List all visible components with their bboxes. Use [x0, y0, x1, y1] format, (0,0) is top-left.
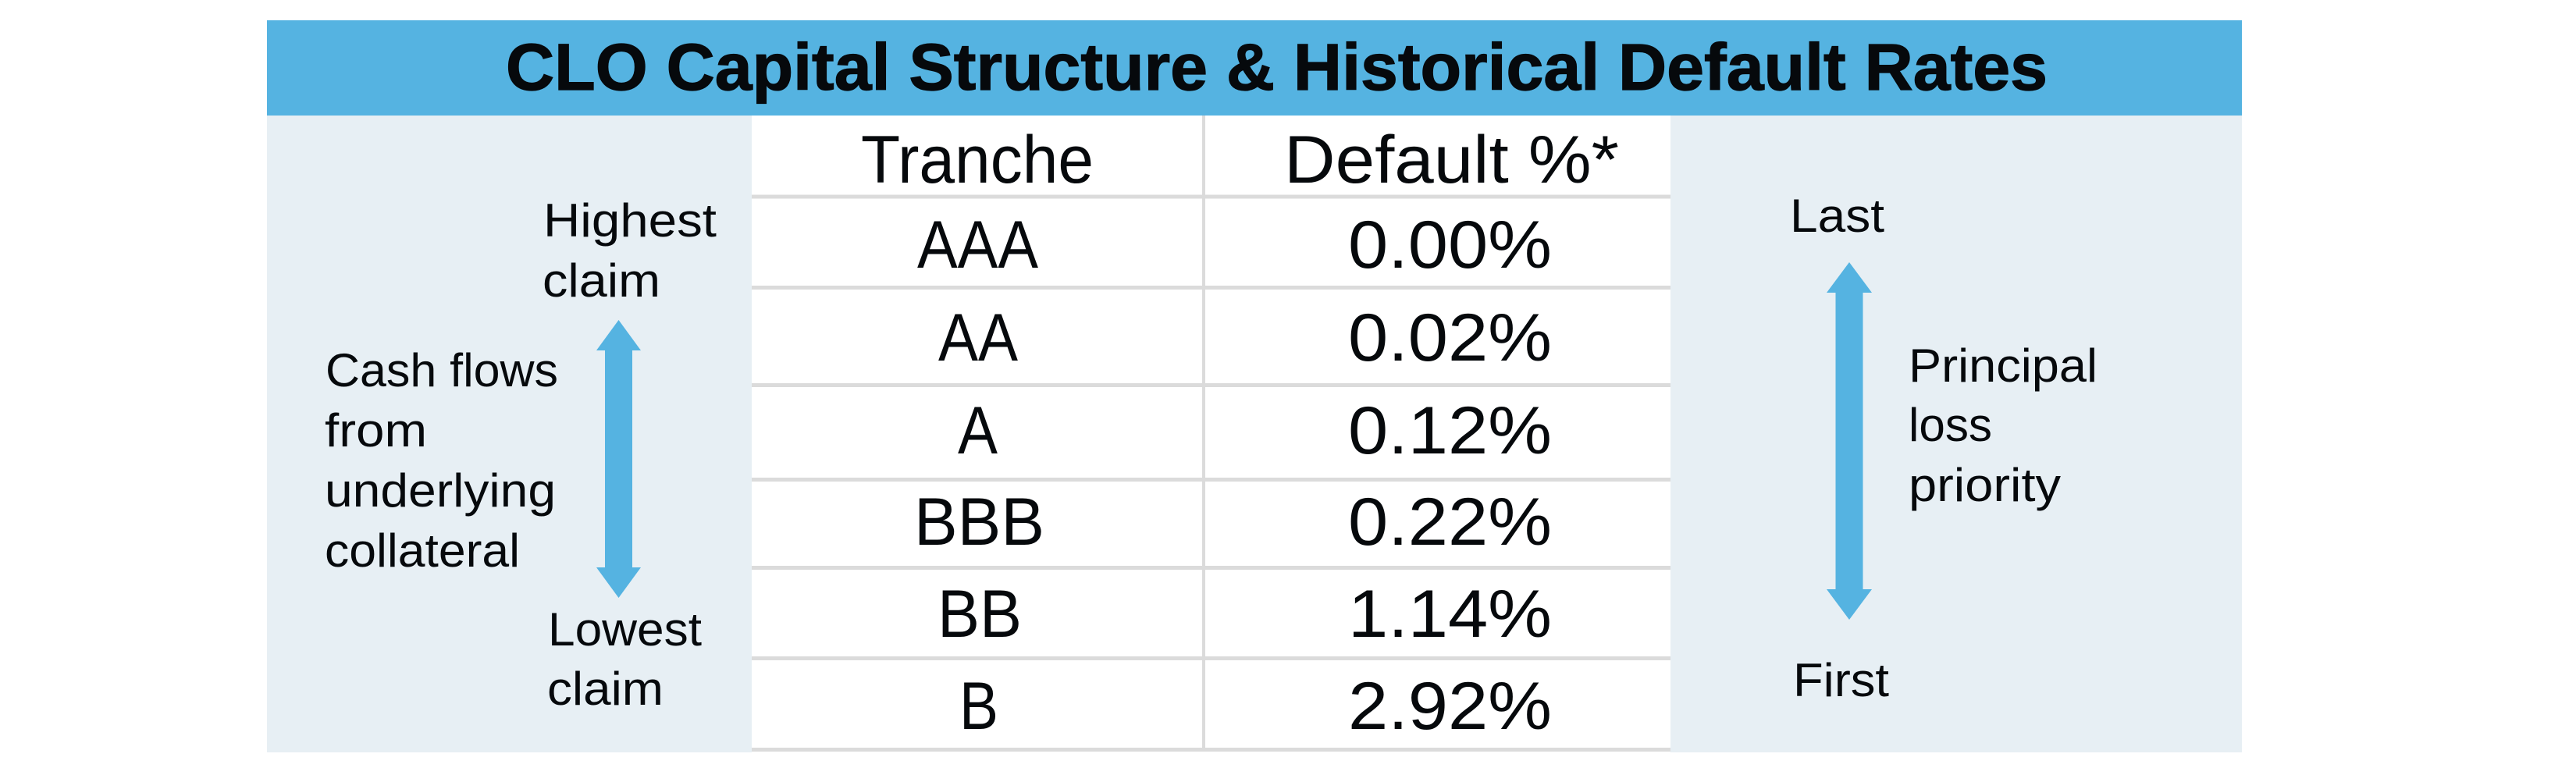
- table: [752, 116, 1670, 752]
- label: lowest claim: [547, 603, 702, 715]
- label: highest claim: claim: [543, 254, 660, 307]
- row: BBB: [914, 485, 1552, 560]
- label: cash flows from underlying collateral: collateral: [325, 524, 520, 577]
- row: BBB: BBB: [914, 485, 1044, 560]
- row: AA: [938, 300, 1552, 375]
- label: lowest claim: Lowest: [548, 603, 702, 656]
- label: principal loss priority: priority: [1909, 459, 2061, 511]
- row: AAA: [917, 208, 1552, 283]
- panel: left side background: [267, 116, 752, 752]
- row: BB: BB: [938, 577, 1022, 652]
- row: A: [958, 393, 1552, 468]
- row: BBB: 0.22%: [1348, 485, 1552, 560]
- label: principal loss priority: [1909, 340, 2097, 511]
- row: A: 0.12%: [1348, 393, 1552, 468]
- label: cash flows from underlying collateral: underlying: [325, 464, 556, 517]
- arrow: cash flow priority double-headed: [596, 320, 641, 598]
- row: B: [959, 669, 1552, 744]
- label: lowest claim: claim: [547, 663, 664, 715]
- label: principal loss priority: loss: [1909, 399, 1992, 451]
- title banner: [267, 20, 2242, 116]
- row: AA: 0.02%: [1348, 300, 1552, 375]
- label: cash flows from underlying collateral: Cash flows: [326, 344, 558, 396]
- label: highest claim: Highest: [543, 194, 717, 247]
- row: BB: [938, 577, 1552, 652]
- row: AAA: AAA: [917, 208, 1039, 283]
- label: principal loss priority: Principal: [1909, 340, 2097, 392]
- label: cash flows from underlying collateral: from: [325, 404, 427, 457]
- row: BB: 1.14%: [1348, 577, 1552, 652]
- panel: right side background: [1670, 116, 2242, 752]
- arrow: principal loss priority double-headed: [1827, 262, 1872, 620]
- title: CLO Capital Structure & Historical Default Rates: [506, 30, 2048, 104]
- label: first: First: [1793, 654, 1889, 706]
- row: B: B: [959, 669, 998, 744]
- label: last: Last: [1790, 190, 1884, 242]
- label: highest claim: [543, 194, 717, 307]
- label: cash flows from underlying collateral: [325, 344, 558, 577]
- row: A: A: [958, 393, 998, 468]
- row: AA: AA: [938, 300, 1019, 375]
- row: AAA: 0.00%: [1348, 208, 1552, 283]
- column header: tranche: Tranche: [861, 123, 1094, 197]
- row: B: 2.92%: [1348, 669, 1552, 744]
- column header: default percent: Default %*: [1284, 123, 1619, 197]
